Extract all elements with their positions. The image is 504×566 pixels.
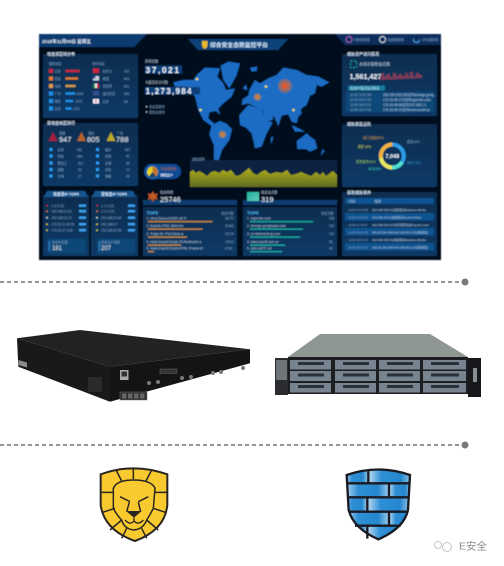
panel: target IP top5: 192.168.20.64 bbox=[101, 216, 122, 220]
panel: latest threat events: 11/09 11:46:07 bbox=[348, 223, 368, 227]
panel: latest threat events: 192.168.25.61感染病毒Exploit.Infelta bbox=[372, 214, 422, 220]
threat donut pill bbox=[144, 164, 181, 180]
top three regions: 788 bbox=[116, 135, 129, 144]
overseas country flags: 801 bbox=[124, 84, 130, 88]
watermark: E安全: E安全 bbox=[459, 540, 488, 552]
panel: attack type top5: 31462 bbox=[225, 224, 234, 228]
overseas country flags: 654 bbox=[124, 92, 130, 96]
panel: attack type top5: 36770 bbox=[225, 216, 234, 220]
icon: lion shield logo bbox=[101, 468, 167, 541]
panel: latest threat events: 11/09 13:50:16 bbox=[348, 216, 368, 220]
region list bbox=[50, 148, 99, 178]
panel: source IP top5: 1.2.3.111 bbox=[52, 204, 65, 208]
domestic region bars: 1226 bbox=[76, 92, 83, 96]
panel: latest threat events: 192.168.253.123访问恶意站点ing.dou.com bbox=[372, 222, 429, 227]
stat: attacked sites: 攻击站点数 bbox=[261, 190, 278, 194]
panel: threat access monitoring: 11/09 09:57:03 bbox=[350, 98, 371, 102]
dashboard screenshot bbox=[39, 34, 441, 260]
panel: threat access monitoring: 威胁资产访问情况 bbox=[347, 50, 379, 56]
panel: threat access monitoring: 11/09 08:50:01 bbox=[350, 103, 371, 107]
header: status rings: 磁盘使用率 bbox=[388, 37, 405, 42]
header: status rings bbox=[335, 34, 441, 45]
stat: attack types: 攻击种类 bbox=[160, 190, 174, 194]
panel: attack source regions: 境外地区 bbox=[92, 61, 106, 66]
panel: attacked regions ranking: 654 bbox=[77, 154, 83, 158]
panel: attacked regions ranking: 90 bbox=[126, 154, 130, 158]
device: storage server bbox=[275, 334, 481, 397]
top three regions: 湖北 bbox=[88, 130, 95, 136]
donut labels: 蠕虫14% bbox=[407, 139, 420, 144]
top three regions: 947 bbox=[59, 135, 72, 144]
overseas country flags: 902 bbox=[124, 70, 130, 74]
panel: attacked regions ranking bbox=[43, 120, 138, 186]
panel: attack type top5: 2. Exploit.HTML.Web.Ker bbox=[146, 224, 185, 228]
stat: total count: 获得总数 bbox=[145, 58, 159, 64]
panel: attack type top5: 4. Hack.Exploit.Script.JS.Redirector.a bbox=[146, 240, 201, 244]
donut labels: 木马16% bbox=[368, 166, 381, 171]
panel: attack type top5: 6738 bbox=[225, 246, 232, 250]
panel: attack type top5: 攻击次数 bbox=[221, 210, 235, 216]
domestic region bars: 北京 bbox=[54, 68, 61, 74]
panel: source IP top5: 192.168.10.61 bbox=[52, 210, 72, 214]
panel: attack type top5: 5. Hack.Exploit.Script.HTML.IFrame.bf bbox=[146, 246, 203, 250]
panel: attacked regions ranking: 86 bbox=[126, 162, 130, 166]
map legend bbox=[146, 104, 166, 114]
panel: attacked regions ranking: 青海 bbox=[58, 174, 65, 178]
panel: attack type top5: 1. Virus.Dacoud-6261 all.Tr bbox=[146, 216, 187, 220]
domestic region bars: 深圳 bbox=[54, 84, 61, 88]
panel: latest threat events: 11/09 08:13:07 bbox=[348, 246, 368, 250]
panel: target IP top5: 207 bbox=[101, 246, 112, 252]
panel: attacked regions ranking: 黑龙江 bbox=[58, 160, 68, 166]
panel: latest threat events bbox=[342, 189, 437, 256]
panel: attacked regions ranking: 72 bbox=[126, 168, 130, 172]
donut chart bbox=[381, 144, 404, 168]
panel: attack type top5: 30174 bbox=[225, 232, 234, 236]
panel: attacked regions ranking: 福州 bbox=[105, 147, 111, 152]
panel: source IP top5: 181 bbox=[52, 246, 63, 252]
stat: attack types bbox=[143, 190, 237, 205]
top three regions: 湖南 bbox=[59, 130, 65, 136]
panel: attack type top5: 19923 bbox=[225, 240, 234, 244]
overseas country flags: 美国 bbox=[102, 76, 109, 81]
panel: attack type top5: TOP5 bbox=[146, 210, 159, 216]
panel: attacked sites top5: 3. cn.bizhost.feng.com bbox=[247, 232, 280, 236]
panel: attacked regions ranking: 海南 bbox=[105, 174, 111, 178]
world map bbox=[173, 62, 329, 164]
panel: threat access monitoring: 172.16.46.86访问192.168.1.1 bbox=[383, 102, 426, 107]
header: platform title bbox=[188, 39, 288, 50]
panel: attacked regions ranking: 成都 bbox=[58, 167, 65, 172]
panel: source IP top5 bbox=[43, 191, 89, 256]
panel: attacked sites top5: 938 bbox=[329, 216, 335, 220]
mini bar chart bbox=[380, 72, 422, 80]
panel: threat access monitoring: 11/08 18:07:55 bbox=[350, 108, 371, 112]
panel: latest threat events: 255.25.255.098/192.168.253.123感染病毒 bbox=[372, 230, 428, 234]
panel: threat type distribution: 威胁类型占比 bbox=[347, 120, 371, 126]
stat: attack types: 25746 bbox=[160, 195, 181, 204]
panel: threat type distribution: 7,048 bbox=[385, 154, 399, 160]
overseas country flags: 墨西哥 bbox=[102, 84, 113, 88]
overseas country flags: 加拿大 bbox=[102, 68, 113, 74]
panel: attacked sites top5: 100 bbox=[329, 232, 335, 236]
donut labels: 恶意软件11% bbox=[356, 159, 376, 164]
panel: threat type distribution bbox=[342, 120, 437, 187]
drive bays bbox=[290, 360, 466, 392]
overseas country flags: 843 bbox=[124, 77, 130, 81]
threat donut pill: 今日总攻击 bbox=[160, 166, 176, 171]
panel: attacked regions ranking: 受攻击地区排行 bbox=[47, 120, 75, 126]
panel: threat access monitoring: 攻击IP/落点站点排名 bbox=[350, 85, 379, 90]
donut labels: 其它7.8% bbox=[407, 160, 421, 165]
panel: threat access monitoring: 172.16.46.10访问www.scsoft.cn bbox=[383, 107, 430, 112]
top three regions: 广东 bbox=[117, 130, 123, 136]
panel: attack type top5: 3. Trojan.Dr. Pref.Gene.a bbox=[146, 232, 183, 236]
panel: attacked sites top5: 132 bbox=[329, 224, 335, 228]
stat: total visits: 卡塞因总访问数 bbox=[145, 80, 169, 84]
panel: attacked sites top5: 1. login.live.com bbox=[247, 216, 271, 220]
panel: attack source regions: 攻击源区域分布 bbox=[47, 50, 75, 56]
panel: attacked regions ranking: 601 bbox=[78, 162, 84, 166]
domestic region bars: 广州 bbox=[54, 91, 61, 96]
panel: attacked sites top5: TOP5 bbox=[247, 210, 259, 216]
stat: total count: 37,021 bbox=[146, 65, 180, 75]
header: date bar: 2018年11月09日 星期五 bbox=[42, 38, 91, 45]
panel: attacked sites top5 bbox=[243, 207, 337, 256]
panel: target IP top5: 192.168.20.95 bbox=[101, 229, 122, 233]
panel: latest threat events: 192.168.253.61感染病毒Backdoor.Berbe bbox=[372, 207, 427, 212]
panel: source IP top5: 攻击源IP TOP5 bbox=[53, 192, 79, 196]
top three regions bbox=[48, 130, 129, 144]
panel: target IP top5: 受攻击IP总数 bbox=[101, 240, 121, 244]
overseas country flags: 日本 bbox=[102, 99, 110, 104]
panel: threat access monitoring: 172.16.48.172访问login.live.com bbox=[383, 97, 431, 102]
panel: latest threat events: 11/09 08:57:24 bbox=[348, 238, 368, 242]
panel: attacked regions ranking: 681 bbox=[77, 148, 83, 152]
domestic region bars bbox=[49, 68, 83, 111]
device: black security appliance bbox=[17, 330, 250, 402]
panel: attack source regions: 国内地区 bbox=[49, 61, 63, 66]
map legend: 受攻击城市 bbox=[149, 109, 166, 114]
panel: latest threat events: 时间 bbox=[348, 198, 355, 204]
stat: total visits: 1,273,984 bbox=[146, 87, 193, 96]
panel: source IP top5: 192.168.10.17 bbox=[52, 216, 72, 220]
donut labels: 挖矿14% bbox=[358, 144, 371, 149]
panel: latest threat events: 描述 bbox=[374, 198, 382, 204]
panel: latest threat events: 最新威胁事件 bbox=[347, 189, 371, 195]
divider line 2 bbox=[0, 442, 468, 448]
stat: attacked sites: 319 bbox=[261, 195, 274, 204]
panel: attack type top5 bbox=[143, 207, 237, 256]
panel: attacked sites top5: 4. www.scsoft.com.cn bbox=[247, 240, 279, 244]
panel: target IP top5: 受攻击IP TOP5 bbox=[101, 192, 127, 196]
domestic region bars: 1011 bbox=[73, 107, 80, 111]
front panel ports bbox=[88, 366, 245, 400]
panel: target IP top5: 1.1.1.101 bbox=[101, 210, 115, 214]
panel: target IP top5: 1.1.1.101 bbox=[101, 204, 115, 208]
panel: attacked regions ranking: 北京 bbox=[58, 147, 64, 152]
stat: total count bbox=[145, 58, 182, 75]
top three regions: 805 bbox=[87, 135, 100, 144]
panel: attacked regions ranking: 96 bbox=[78, 168, 82, 172]
panel: attacked regions ranking: 35 bbox=[126, 174, 130, 178]
panel: source IP top5: 172.23.11.60.95 bbox=[52, 223, 75, 227]
overseas country flags bbox=[93, 68, 130, 104]
panel: latest threat events: 11/09 09:52:58 bbox=[348, 230, 368, 234]
panel: attacked sites top5: 58 bbox=[329, 240, 333, 244]
domestic region bars: 南京 bbox=[54, 98, 61, 104]
panel: attacked sites top5: 攻击次数 bbox=[321, 210, 335, 216]
panel: threat access monitoring: 1,561,427 bbox=[350, 72, 381, 81]
map legend: 攻击源城市 bbox=[149, 104, 166, 109]
domestic region bars: 1023 bbox=[75, 100, 82, 104]
domestic region bars: 北京 bbox=[54, 106, 61, 111]
panel: source IP top5: 攻击IP总数 bbox=[52, 240, 69, 244]
panel: attacked sites top5: 2. storage.googleapis.com bbox=[247, 224, 286, 228]
panel: threat access monitoring bbox=[342, 50, 437, 116]
panel: target IP top5 bbox=[91, 191, 138, 256]
panel: threat access monitoring: 255.255.255.255访问storage.goog… bbox=[383, 92, 437, 97]
icon: blue brick wall shield logo bbox=[345, 467, 412, 541]
overseas country flags: 98 bbox=[124, 100, 128, 104]
panel: latest threat events: 255.25.255.098/192.168.253.123感染病毒 bbox=[372, 244, 428, 250]
attack trend area chart bbox=[190, 156, 337, 187]
stat: total visits bbox=[145, 80, 200, 96]
header: date bar bbox=[39, 34, 147, 47]
map hot spots bbox=[196, 78, 295, 138]
panel: attack source regions bbox=[43, 50, 138, 118]
header: status rings: CPU使用率 bbox=[422, 37, 439, 42]
panel: attacked regions ranking: 吉林 bbox=[105, 154, 112, 158]
donut labels bbox=[356, 135, 421, 171]
attack trend area chart: 威胁趋势 bbox=[192, 156, 206, 162]
panel: attacked regions ranking: 557 bbox=[125, 148, 131, 152]
domestic region bars: 西安 bbox=[54, 76, 61, 81]
panel: attacked regions ranking: 重庆 bbox=[105, 167, 112, 172]
panel: latest threat events: 192.168.253.61感染病毒Backdoor.Berbe bbox=[372, 237, 427, 242]
panel: attacked regions ranking: 西安 bbox=[58, 154, 64, 158]
panel: source IP top5: 172.23.17.3.69 bbox=[52, 229, 73, 233]
panel: threat access monitoring: 11/09 14:57:58 bbox=[350, 93, 371, 97]
threat donut pill: 9811+ bbox=[160, 172, 173, 178]
panel: attacked regions ranking: 天津 bbox=[105, 160, 112, 166]
panel: attacked sites top5: 49 bbox=[329, 246, 333, 250]
panel: threat access monitoring: 本周访客数量总数 bbox=[359, 62, 390, 66]
panel: target IP top5: 192.168.0.7 bbox=[101, 223, 118, 227]
divider line 1 bbox=[0, 278, 468, 286]
watermark: E安全 bbox=[434, 540, 488, 552]
stat: attacked sites bbox=[243, 190, 337, 205]
overseas country flags: 澳大利亚 bbox=[102, 91, 116, 96]
panel: attacked regions ranking: 27 bbox=[78, 174, 82, 178]
header: status rings: 内存使用率 bbox=[354, 37, 371, 42]
header: platform title: 综合安全态势监控平台 bbox=[210, 41, 268, 49]
panel: attacked sites top5: 5. click.adf72.net bbox=[247, 246, 272, 250]
donut labels: 后门/远控37% bbox=[363, 135, 384, 140]
panel: latest threat events: 11/09 14:03:58 bbox=[348, 208, 368, 212]
